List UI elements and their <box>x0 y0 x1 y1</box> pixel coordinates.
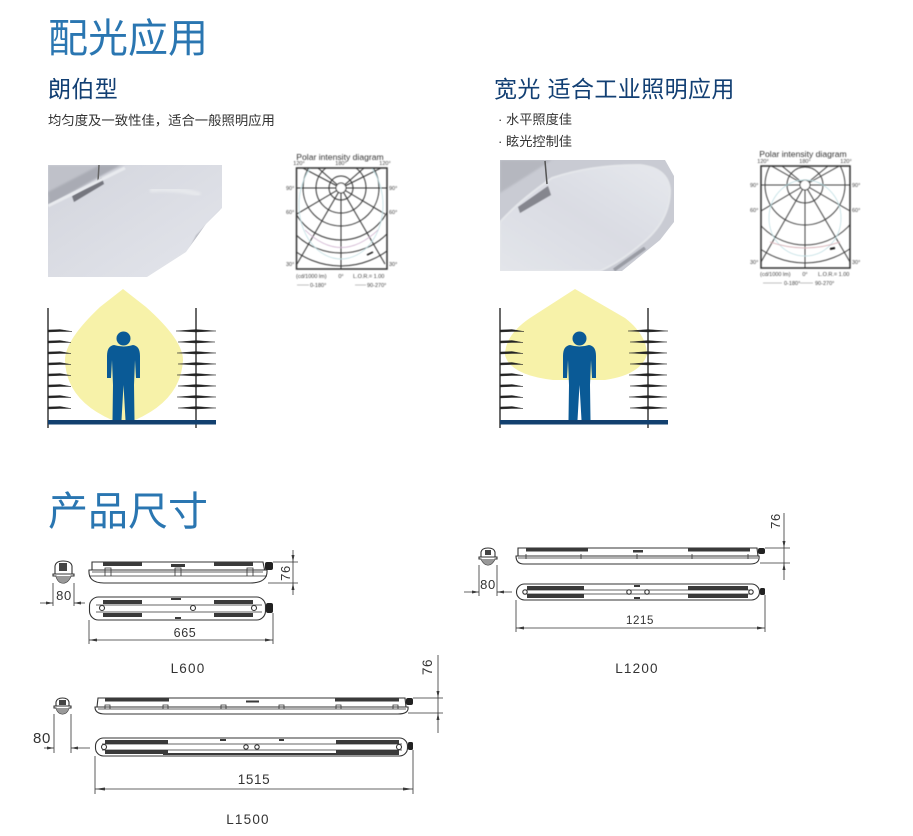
dimension drawing: L600: 76 <box>278 565 293 581</box>
photo: Lambertian luminaire <box>48 165 222 277</box>
text: Lambertian description: 均匀度及一致性佳，适合一般照明应用 <box>48 113 275 128</box>
chart: polar intensity diagram wide beam: 0° <box>802 272 808 278</box>
chart: polar intensity diagram wide beam: 180° <box>799 159 811 165</box>
diagram: wide beam with person <box>500 289 668 428</box>
dimension drawing: L600: 80 <box>56 588 72 603</box>
dimension drawing: L1200 <box>464 513 790 632</box>
top view <box>516 584 765 600</box>
chart: polar intensity diagram Lambertian: 90° <box>286 186 294 192</box>
light distribution shape <box>505 289 647 380</box>
chart: polar intensity diagram wide beam: 0-180° <box>784 281 800 287</box>
chart: polar intensity diagram wide beam: 30° <box>852 260 860 266</box>
chart: polar intensity diagram wide beam: Polar intensity diagram <box>759 149 847 159</box>
chart: polar intensity diagram wide beam: 90° <box>750 183 758 189</box>
chart: polar intensity diagram Lambertian: 0-180° <box>310 283 326 289</box>
chart: polar intensity diagram Lambertian: 90° <box>389 186 397 192</box>
chart: polar intensity diagram Lambertian: 0° <box>338 274 344 280</box>
end view <box>54 698 71 714</box>
chart: polar intensity diagram Lambertian <box>286 153 398 288</box>
floor <box>500 420 668 424</box>
chart: polar intensity diagram Lambertian: 180° <box>335 161 347 167</box>
heading: Lambertian: 朗伯型 <box>48 76 118 102</box>
diagram: Lambertian beam with person <box>48 289 216 428</box>
label: L600: L600 <box>171 661 205 676</box>
title: light distribution: 配光应用 <box>48 17 208 61</box>
chart: polar intensity diagram Lambertian: (cd/1000 lm) <box>296 274 327 280</box>
chart: polar intensity diagram Lambertian: L.O.R.= 1.00 <box>353 274 384 280</box>
side view <box>89 562 273 583</box>
text: wide beam bullets: · 眩光控制佳 <box>498 134 572 149</box>
side view <box>95 698 413 714</box>
chart: polar intensity diagram wide beam: 60° <box>750 208 758 214</box>
side view <box>516 548 765 564</box>
chart: polar intensity diagram wide beam: (cd/1000 lm) <box>760 272 791 278</box>
label: L1500: L1500 <box>226 812 270 827</box>
top view <box>96 738 413 756</box>
chart: polar intensity diagram wide beam: 120° <box>840 159 852 165</box>
dimension drawing: L1200: 1215 <box>626 615 654 627</box>
top view <box>90 597 273 620</box>
chart: polar intensity diagram wide beam: 60° <box>852 208 860 214</box>
end view <box>479 548 497 565</box>
chart: polar intensity diagram wide beam: 90-270° <box>815 281 834 287</box>
dimension drawing: L600 <box>40 550 298 644</box>
chart: polar intensity diagram Lambertian: 120° <box>293 161 305 167</box>
racking <box>500 308 668 428</box>
label: L1200: L1200 <box>615 661 659 676</box>
heading: wide beam: 宽光 适合工业照明应用 <box>494 76 735 102</box>
icon: person <box>563 332 596 420</box>
icon: person <box>107 332 140 420</box>
dimension drawing: L1200: 76 <box>768 513 783 529</box>
text: wide beam bullets <box>498 112 572 149</box>
dimension drawing: L600: 665 <box>174 626 196 640</box>
chart: polar intensity diagram Lambertian: Polar intensity diagram <box>296 152 384 162</box>
racking <box>48 308 216 428</box>
floor <box>48 420 216 424</box>
dimension drawing: L1500: 80 <box>33 730 51 747</box>
light distribution shape <box>65 289 183 420</box>
chart: polar intensity diagram wide beam <box>750 150 860 286</box>
chart: polar intensity diagram Lambertian: 30° <box>389 262 397 268</box>
chart: polar intensity diagram wide beam: L.O.R.= 1.00 <box>818 272 849 278</box>
chart: polar intensity diagram Lambertian: 90-270° <box>367 283 386 289</box>
chart: polar intensity diagram Lambertian: 60° <box>286 210 294 216</box>
chart: polar intensity diagram wide beam: 90° <box>852 183 860 189</box>
dimension drawing: L1500: 1515 <box>238 772 270 787</box>
chart: polar intensity diagram Lambertian: 30° <box>286 262 294 268</box>
dimension drawing: L1500: 76 <box>420 659 435 675</box>
dimension drawing: L1200: 80 <box>480 577 496 592</box>
photo: wide beam luminaire <box>500 160 674 271</box>
chart: polar intensity diagram wide beam: 30° <box>750 260 758 266</box>
chart: polar intensity diagram Lambertian: 60° <box>389 210 397 216</box>
title: product dimensions: 产品尺寸 <box>48 490 208 534</box>
chart: polar intensity diagram Lambertian: 120° <box>379 161 391 167</box>
dimension drawing: L1500 <box>33 655 443 794</box>
text: wide beam bullets: · 水平照度佳 <box>498 112 572 127</box>
chart: polar intensity diagram wide beam: 120° <box>757 159 769 165</box>
end view <box>53 561 74 583</box>
